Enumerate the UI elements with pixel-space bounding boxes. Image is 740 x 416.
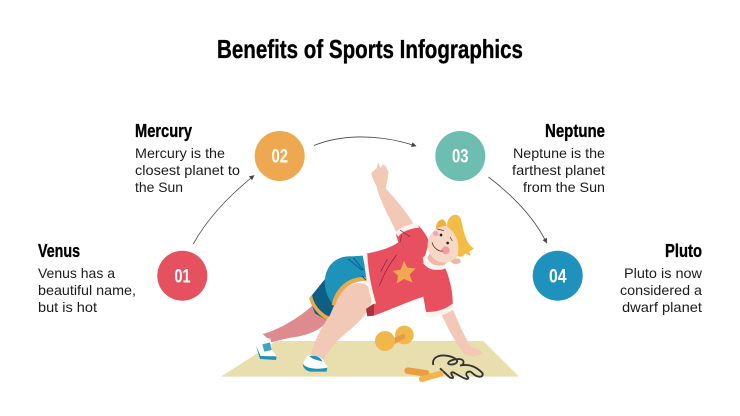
badge 04: 04 [549, 266, 567, 288]
front leg [309, 283, 372, 359]
panel: Neptune [512, 121, 605, 195]
badge 02 [255, 131, 305, 181]
text block: Pluto description: Pluto is now [624, 265, 703, 281]
neck and collar [423, 252, 451, 270]
star [393, 261, 416, 284]
badge 02: 02 [272, 146, 288, 168]
shirt white trims [364, 223, 454, 317]
arrow: 03 to 04 [488, 177, 547, 243]
text block: Neptune description: from the Sun [523, 179, 605, 195]
hair [447, 215, 474, 257]
badge 04 [533, 251, 583, 301]
text block: Mercury description: closest planet to [135, 162, 240, 178]
text block: Venus description [38, 265, 136, 315]
badge 01: 01 [174, 266, 191, 288]
text block: Pluto description: considered a [620, 282, 702, 298]
title: Benefits of Sports Infographics [217, 34, 523, 64]
heading: Mercury: Mercury [135, 121, 192, 141]
text block: Venus description: beautiful name, [38, 282, 136, 298]
shorts: front [325, 256, 368, 306]
text block: Pluto description: dwarf planet [622, 299, 702, 315]
back leg [263, 306, 329, 342]
text block: Venus description: Venus has a [38, 265, 115, 281]
raised arm [371, 162, 413, 232]
text block: Pluto description [620, 265, 703, 315]
text block: Neptune description [512, 145, 605, 195]
head [424, 215, 474, 267]
text block: Mercury description: the Sun [135, 179, 183, 195]
heading: Pluto: Pluto [665, 241, 702, 261]
shirt folds [379, 230, 410, 286]
heading: Neptune: Neptune [545, 121, 605, 141]
arrow: 01 to 02 [193, 176, 254, 244]
text block: Neptune description: Neptune is the [513, 145, 605, 161]
text block: Venus description: but is hot [38, 299, 97, 315]
shorts: back leg [309, 279, 342, 321]
badge 03 [435, 131, 485, 181]
text block: Mercury description [135, 145, 240, 195]
supporting arm and hand [440, 309, 483, 357]
arrow: 02 to 03 [314, 137, 416, 146]
exercise mat [221, 341, 519, 377]
text block: Mercury description: Mercury is the [135, 145, 225, 161]
illustration: athlete on mat [221, 162, 519, 379]
badge 03: 03 [452, 146, 468, 168]
badge 01 [157, 251, 207, 301]
panel: Venus [38, 241, 136, 315]
back shoe [256, 338, 277, 360]
heading: Venus: Venus [38, 241, 80, 261]
text block: Neptune description: farthest planet [512, 162, 605, 178]
dumbbell [375, 326, 414, 351]
panel: Mercury [135, 121, 240, 195]
jump rope [408, 355, 483, 379]
front shoe [303, 355, 327, 372]
panel: Pluto [620, 241, 703, 315]
red shirt [364, 223, 454, 317]
